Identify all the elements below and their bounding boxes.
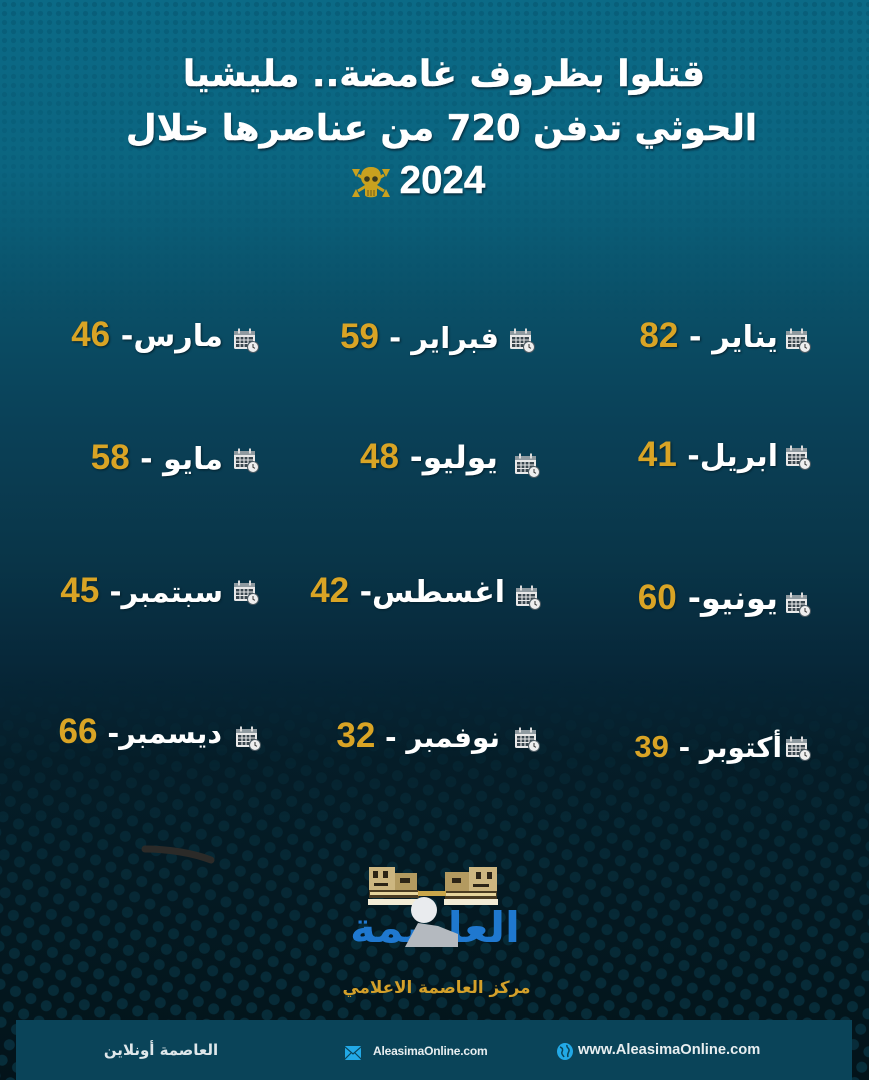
month: March: مارس- 46 — [71, 315, 223, 354]
icon: skull and crossbones — [352, 167, 390, 198]
month: September: سبتمبر- 45 — [60, 571, 223, 610]
icon: grey emblem — [405, 897, 458, 947]
logo wordmark: العاصمة — [350, 903, 520, 952]
icon: globe — [557, 1043, 573, 1060]
footer: brand name: العاصمة أونلاين — [104, 1041, 218, 1059]
smudge mark — [142, 846, 214, 864]
footer: email: AleasimaOnline.com — [373, 1044, 487, 1058]
month: October: أكتوبر - 39 — [634, 729, 782, 764]
month: April: ابريل- 41 — [638, 435, 778, 474]
month: November: نوفمبر - 32 — [336, 716, 500, 755]
title: الحوثي تدفن 720 من عناصرها خلال — [126, 108, 757, 149]
month: June: يونيو- 60 — [638, 578, 778, 617]
icon: right building — [444, 867, 498, 905]
logo caption: مركز العاصمة الاعلامي — [342, 977, 530, 997]
title: قتلوا بظروف غامضة.. مليشيا — [183, 54, 705, 95]
title: 2024 — [400, 159, 485, 202]
month: July: يوليو- 48 — [360, 437, 498, 476]
month: August: اغسطس- 42 — [310, 571, 505, 610]
month: May: مايو - 58 — [91, 438, 223, 477]
month: January: يناير - 82 — [639, 316, 778, 355]
footer: website: www.AleasimaOnline.com — [578, 1042, 760, 1058]
month: February: فبراير - 59 — [340, 317, 499, 356]
title — [126, 54, 757, 202]
footer bar — [16, 1020, 852, 1080]
month: December: ديسمبر- 66 — [58, 712, 222, 751]
icon: mail — [345, 1046, 361, 1060]
logo — [350, 867, 520, 952]
icon: gold connector — [418, 891, 446, 896]
icon: left building — [368, 867, 420, 905]
